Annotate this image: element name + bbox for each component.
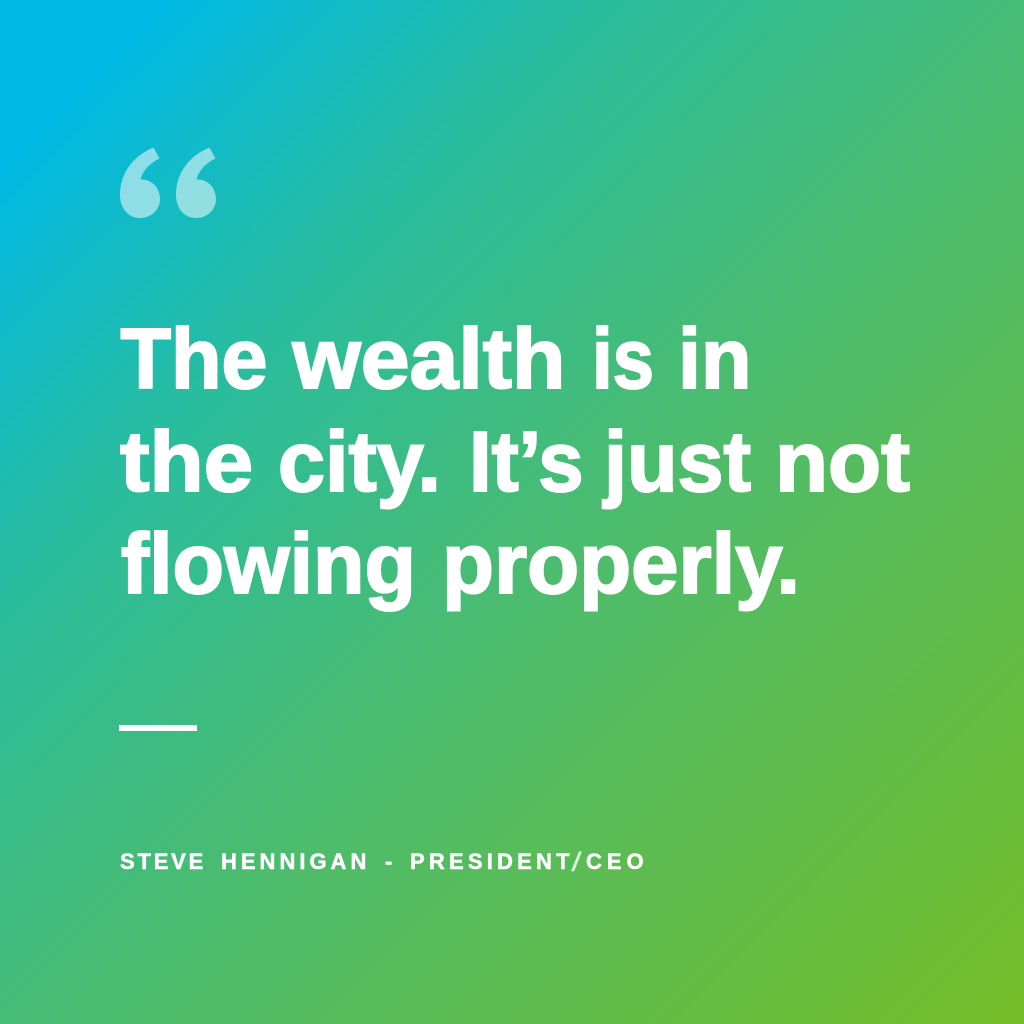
attribution xyxy=(120,847,649,877)
quote text: the xyxy=(120,415,253,510)
attribution: - xyxy=(385,849,392,874)
quote text: flowing xyxy=(121,517,416,612)
attribution: STEVE xyxy=(120,849,206,874)
quote text: not xyxy=(775,415,910,510)
attribution: CEO xyxy=(586,849,649,874)
attribution: / xyxy=(571,847,583,877)
quote text: just xyxy=(602,415,751,510)
quote text: city. xyxy=(278,415,441,510)
attribution: HENNIGAN xyxy=(221,849,370,874)
quote text: properly. xyxy=(442,517,800,612)
divider rule xyxy=(119,725,197,731)
quote text: is xyxy=(592,312,654,407)
quote text: wealth xyxy=(291,312,566,407)
attribution: PRESIDENT xyxy=(410,849,574,874)
quote text xyxy=(120,312,910,612)
quote text: The xyxy=(120,312,268,407)
icon: opening quotation marks xyxy=(120,148,216,218)
quote text: It’s xyxy=(469,415,584,510)
quote text: in xyxy=(678,312,752,407)
